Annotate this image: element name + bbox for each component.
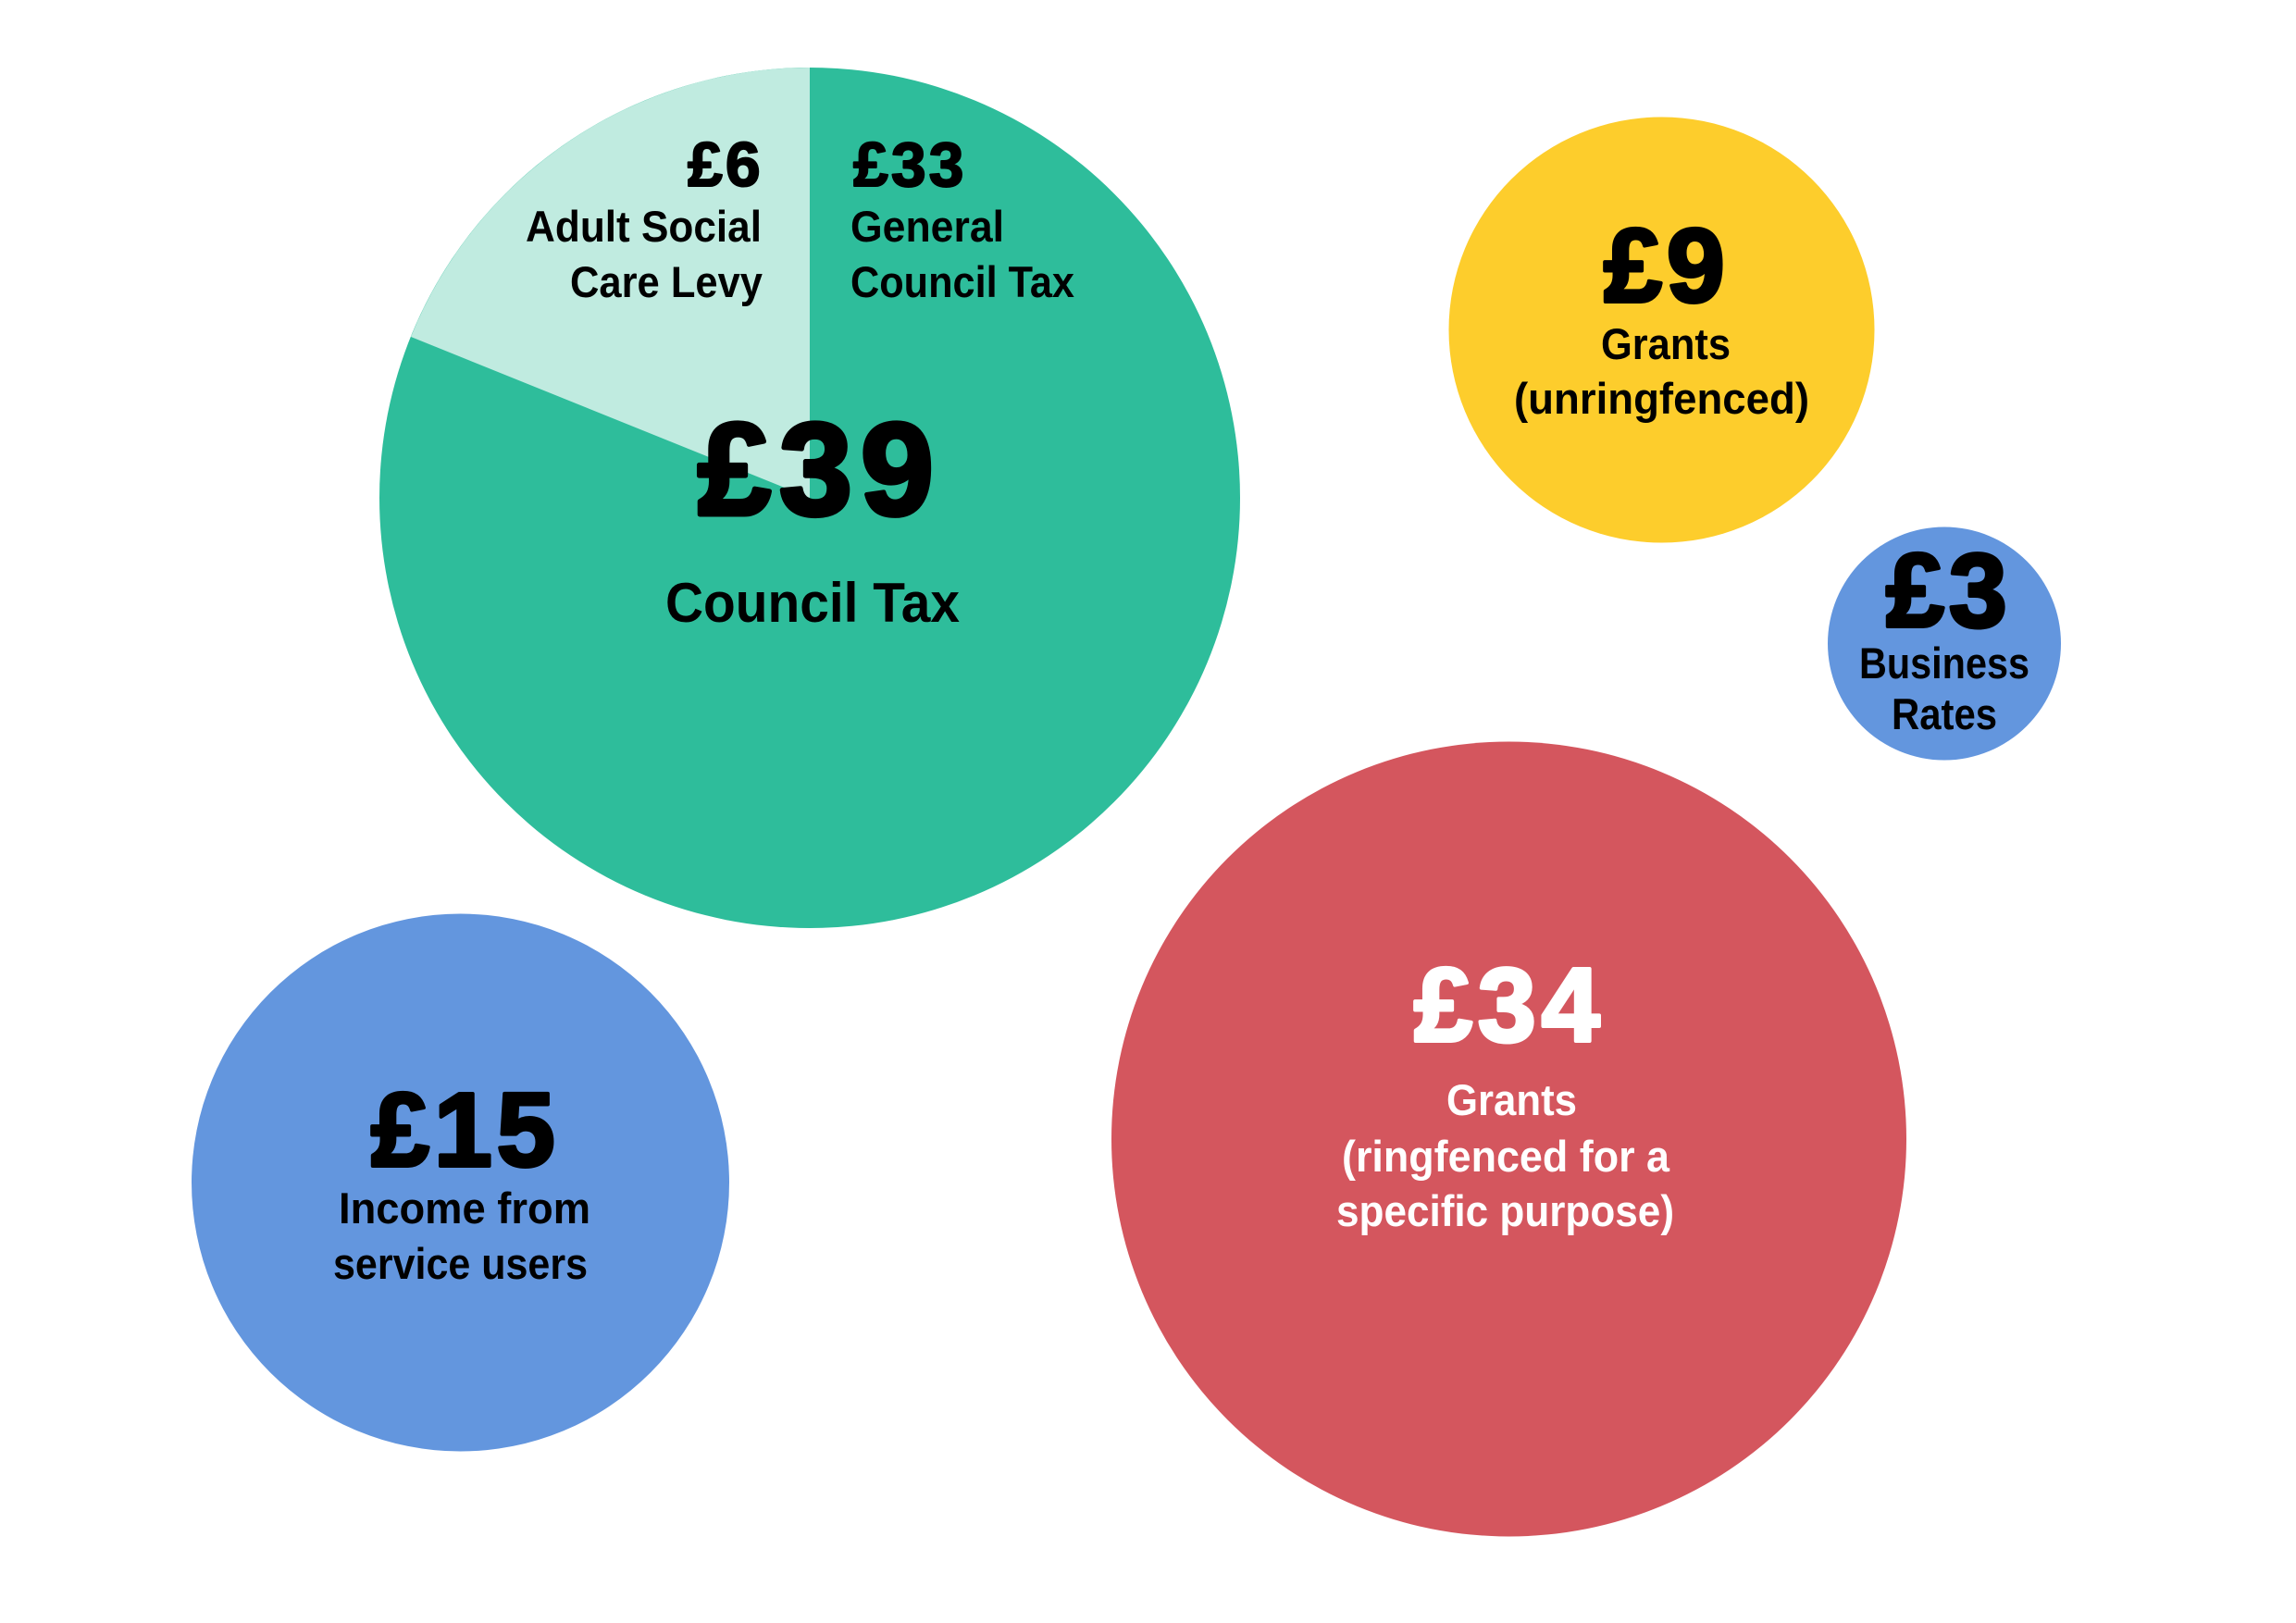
circle: blue [192,914,729,1451]
circle: small blue [1828,527,2061,761]
panel: income from service users [192,914,729,1451]
label: business rates [1859,638,2029,738]
value: thirty-four pounds: £34 [1414,947,1606,1063]
label: business rates: Business [1859,638,2029,688]
label: adult social care levy: £6 [688,130,763,200]
circle: red [1111,742,1906,1536]
label: grants ringfenced: Grants [1446,1075,1577,1124]
panel: ringfenced grants [1111,742,1906,1536]
label: general council tax: General [850,202,1004,251]
pie: general council tax slice [379,68,1240,928]
label: adult social care levy: Adult Social [526,202,762,251]
label: grants ringfenced [1336,1075,1674,1235]
panel: Council Tax pie [379,68,1240,928]
value: fifteen pounds: £15 [371,1072,560,1188]
label: grants ringfenced: (ringfenced for a [1342,1132,1670,1181]
label: council tax: Council Tax [665,572,960,634]
pie: adult social care levy slice [411,68,810,498]
label: income from service users: Income from [339,1183,590,1233]
value: three pounds: £3 [1886,532,2012,649]
label: adult social care levy: Care Levy [570,257,763,306]
label: grants unringfenced [1514,319,1809,423]
label: general council tax [850,130,1074,306]
value: nine pounds: £9 [1604,207,1730,324]
label: general council tax: £33 [853,130,966,200]
label: grants unringfenced: (unringfenced) [1514,374,1809,423]
label: adult social care levy [526,130,763,306]
panel: business rates [1828,527,2061,761]
label: grants unringfenced: Grants [1601,319,1731,368]
label: general council tax: Council Tax [850,257,1074,306]
value: council tax total: £39 [698,396,942,543]
label: business rates: Rates [1892,689,1997,738]
label: income from service users: service users [333,1239,588,1288]
label: grants ringfenced: specific purpose) [1336,1186,1674,1235]
circle: yellow [1449,117,1875,542]
panel: unringfenced grants [1449,117,1875,542]
label: income from service users [333,1183,590,1288]
